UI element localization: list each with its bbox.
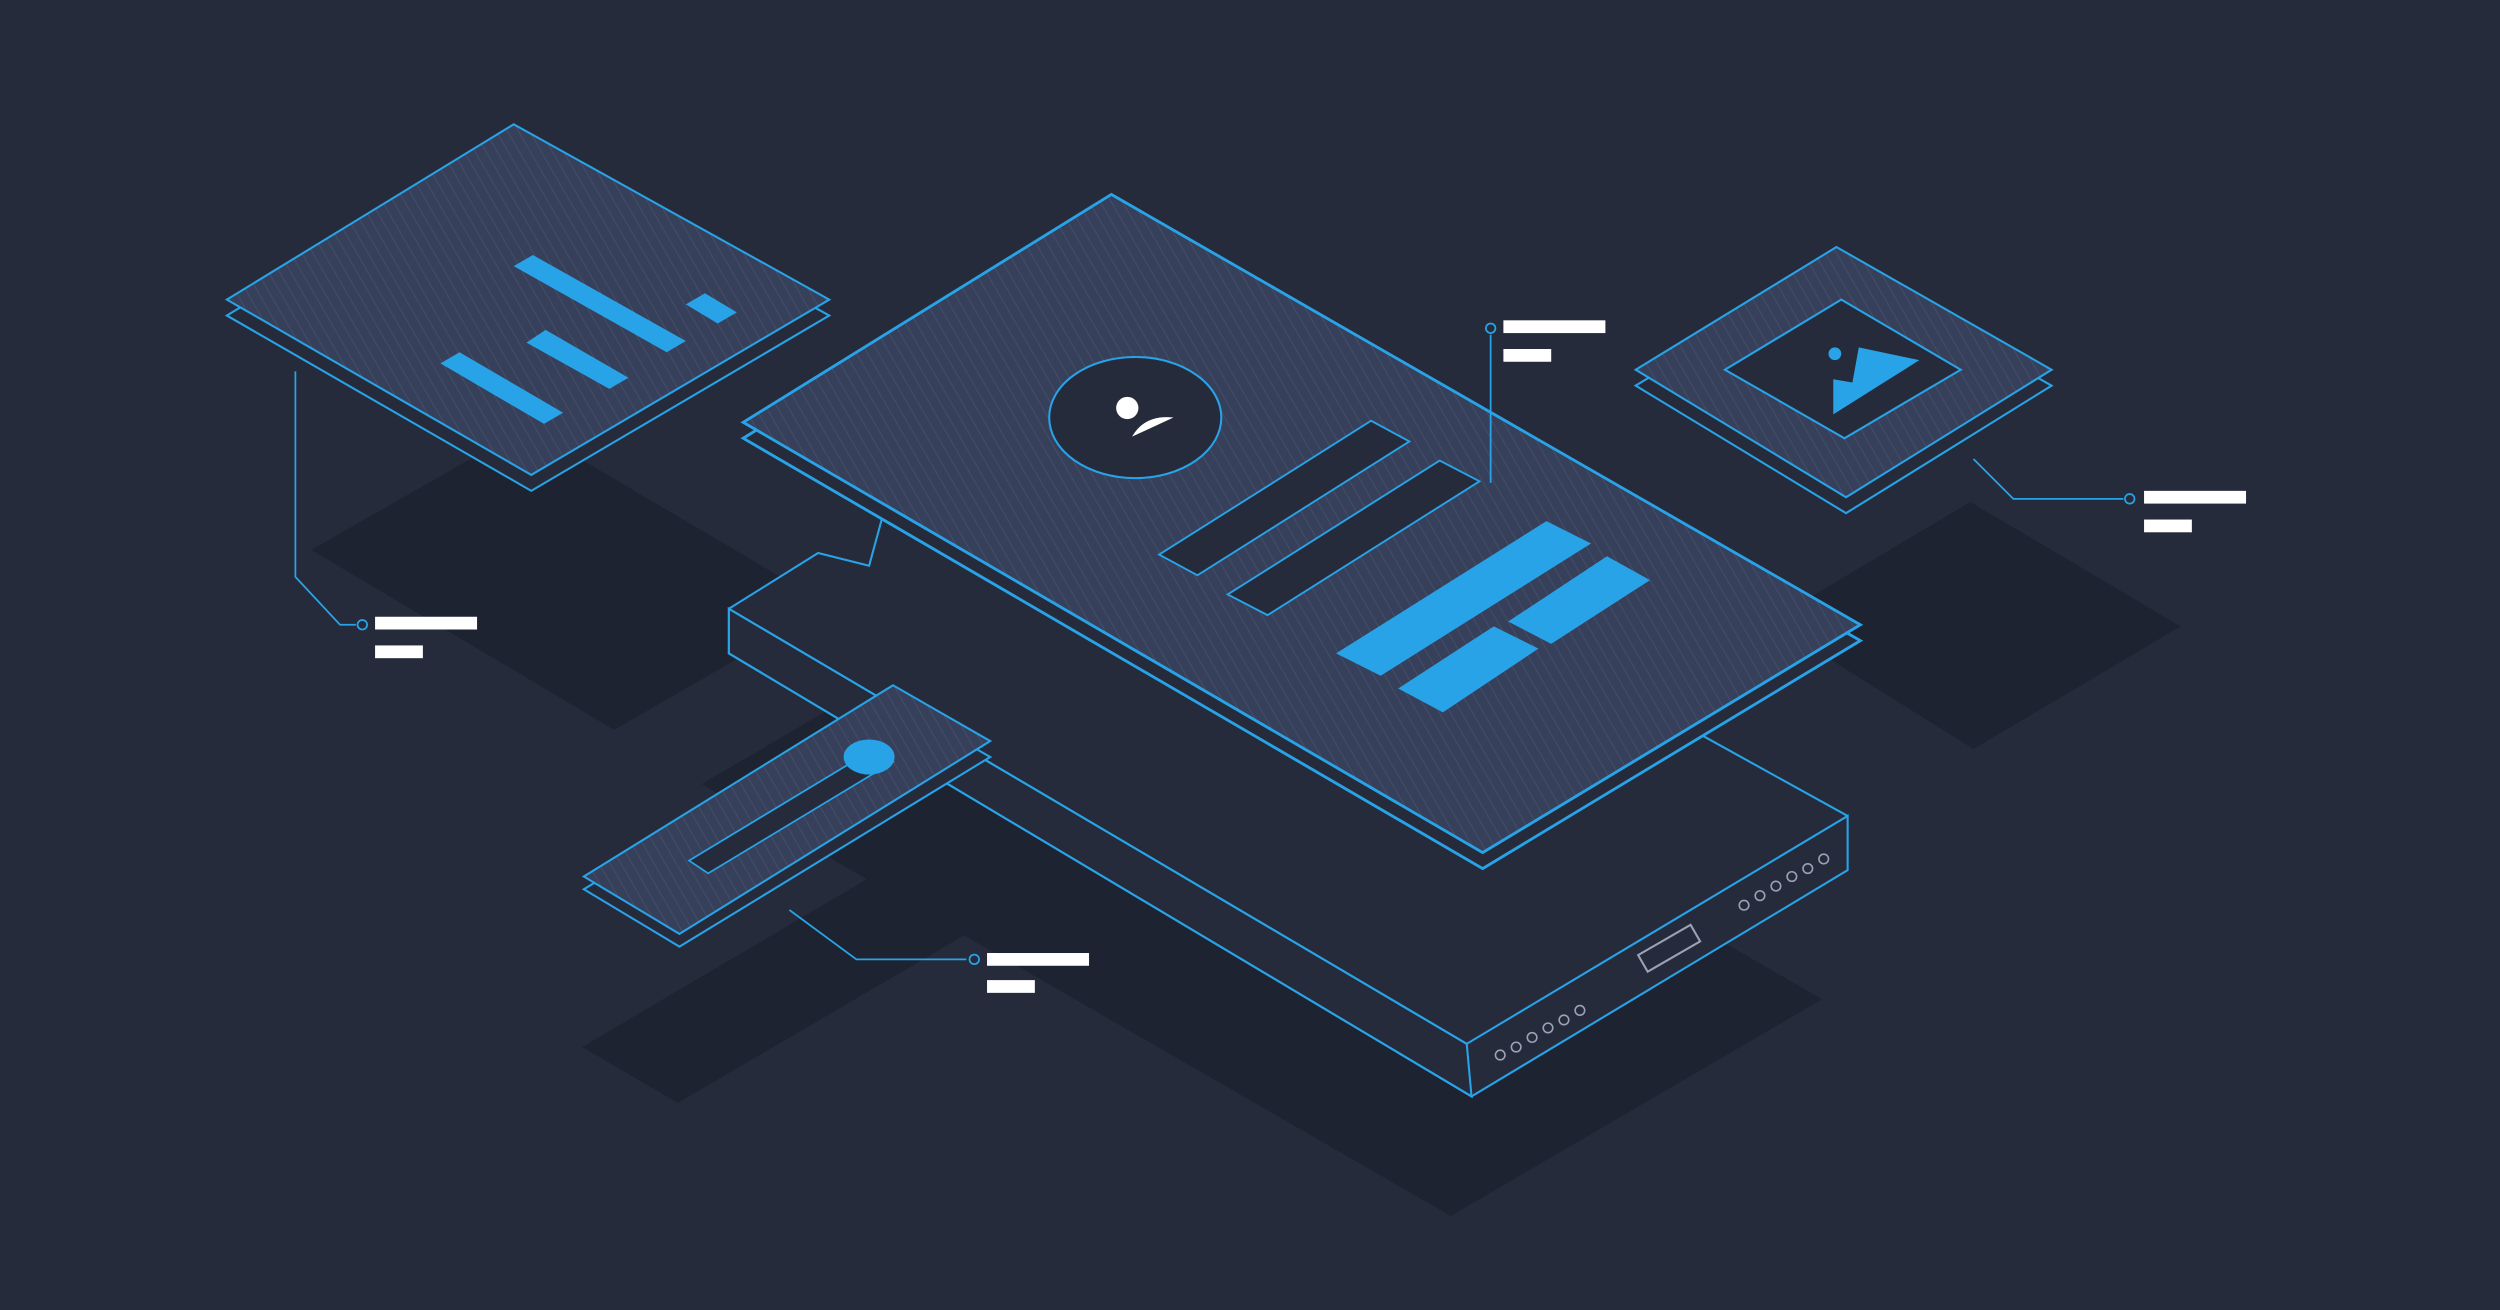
callouts xyxy=(295,324,2134,964)
panel: main screen xyxy=(743,194,1860,869)
panel: left card xyxy=(227,124,829,491)
panel: slider card xyxy=(584,685,990,947)
shadows xyxy=(311,427,2181,1216)
input fields xyxy=(1159,421,1479,615)
phone body xyxy=(729,462,1848,1096)
buttons xyxy=(1336,521,1650,712)
avatar xyxy=(1049,357,1221,478)
panel: right image card xyxy=(1636,247,2052,513)
